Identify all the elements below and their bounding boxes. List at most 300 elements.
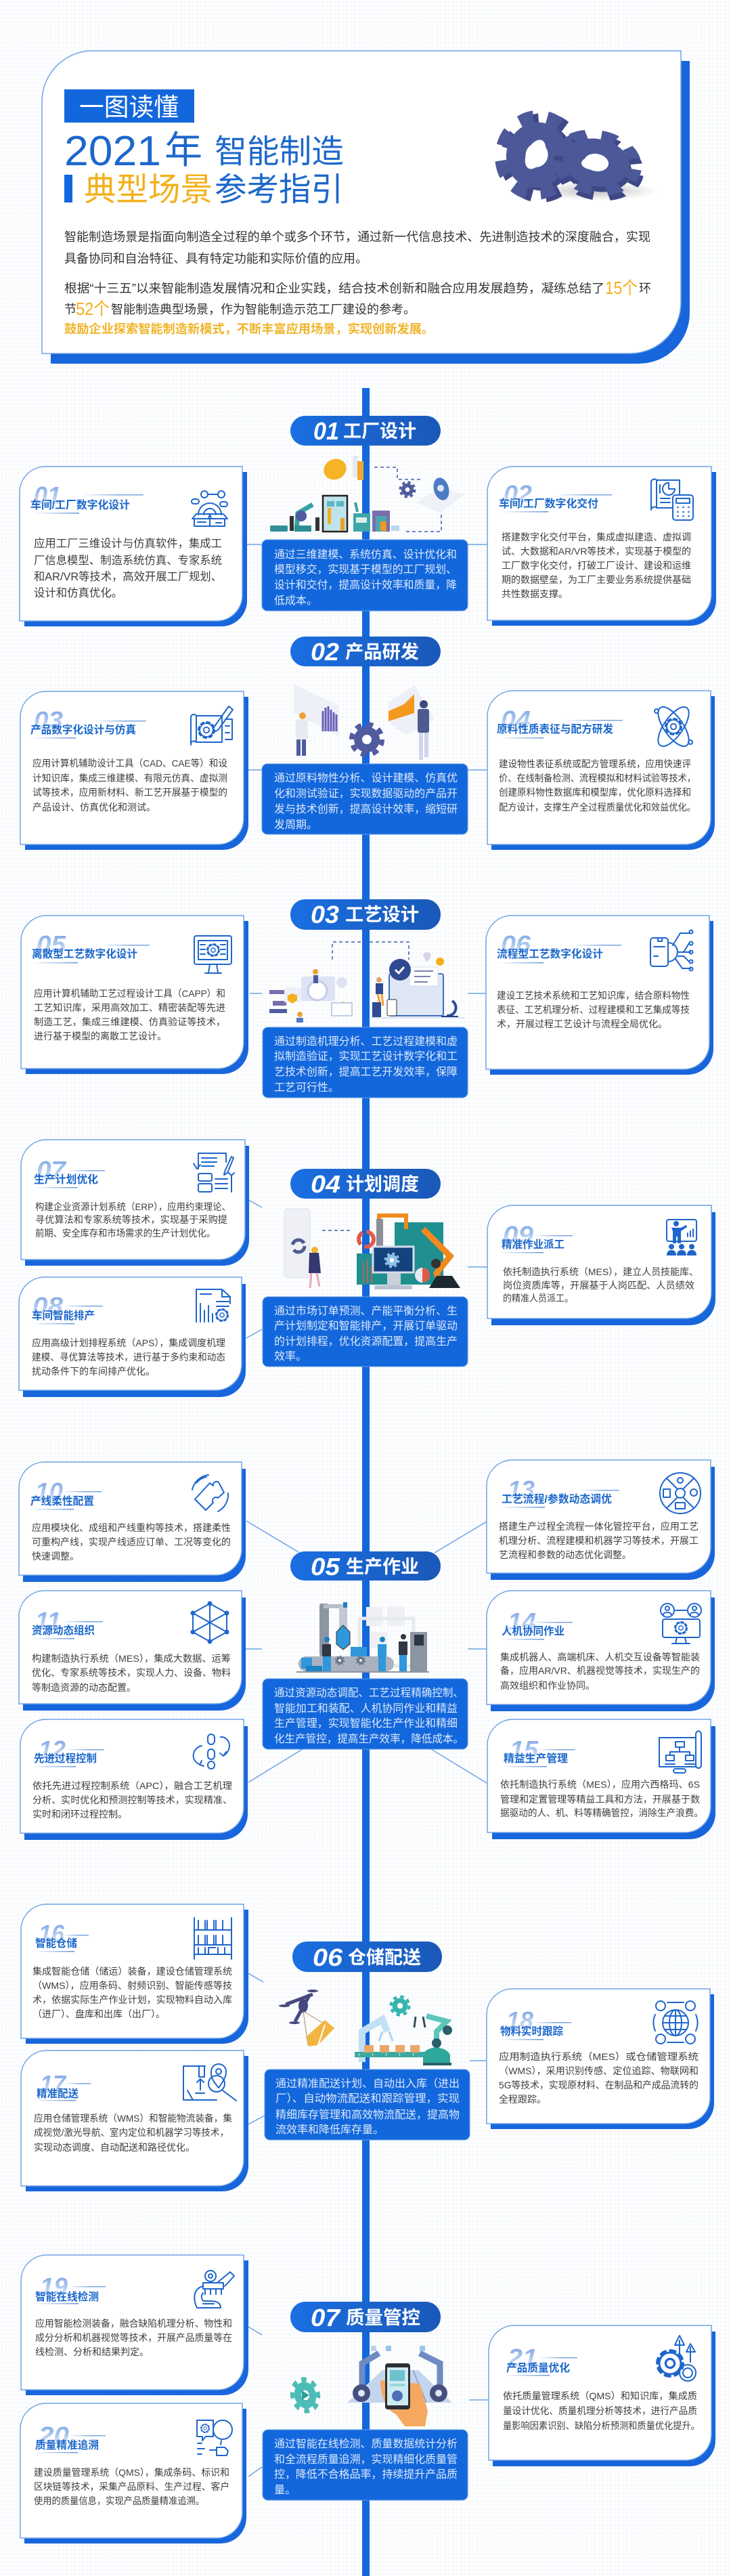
heading pill: 06 仓储配送: 仓储配送 (348, 1948, 421, 1968)
title: 智能制造 (215, 134, 344, 170)
icon: puzzle (192, 1475, 228, 1511)
card shape (487, 1591, 715, 1711)
section 04 (19, 1140, 715, 1397)
heading pill: 05 生产作业 (290, 1551, 441, 1581)
body text: 快速调整。 (32, 1551, 79, 1562)
decor lines and heading (500, 1622, 573, 1640)
section 05 (19, 1460, 715, 1840)
body text: 搭建数字化交付平台，集成虚拟建造、虚拟调 (502, 532, 691, 542)
summary box 01: 模型移交，实现基于模型的工厂规划、 (274, 563, 457, 576)
panel: scenario 12 (20, 1719, 248, 1840)
panel: scenario 06 (486, 916, 713, 1075)
body text: 实时和闭环过程控制。 (32, 1809, 127, 1820)
illustration: planning and scheduling (284, 1209, 460, 1289)
body text: （WMS），应用条码、射频识别、智能传感等技 (32, 1980, 232, 1991)
intro paragraph 2: 根据“十三五”以来智能制造发展情况和企业实践，结合技术创新和融合应用发展趋势，凝练总结了 (64, 282, 604, 295)
title: 参考指引 (215, 172, 343, 208)
panel: scenario 21 (489, 2325, 715, 2466)
card shape (20, 2403, 246, 2543)
body text: 集成智能仓储（储运）装备，建设仓储管理系统 (32, 1966, 232, 1977)
number: 21 (507, 2344, 537, 2371)
decor lines and heading: 车间智能排产 (32, 1309, 95, 1322)
summary box 05 (263, 1679, 468, 1749)
decor lines and heading (30, 1621, 103, 1639)
body text: 建模、寻优算法等技术，进行基于多约束和动态 (32, 1352, 225, 1362)
heading pill: 06 仓储配送: 06 (313, 1944, 343, 1971)
icon: blueprint and pencil (191, 706, 233, 745)
decor lines and heading (34, 1170, 105, 1188)
body text (32, 1522, 231, 1562)
number: 08 (32, 1292, 63, 1320)
number: 18 (506, 2006, 533, 2034)
decor lines and heading: 车间/工厂数字化交付 (499, 497, 598, 510)
body text: 量影响因素识别、缺陷分析预测和质量优化提升。 (503, 2420, 700, 2431)
panel: scenario 15 (487, 1719, 715, 1839)
body text: 实现动态调度、自动配送和路径优化。 (34, 2142, 195, 2153)
body text: 应用计算机辅助工艺过程设计工具（CAPP）和 (34, 988, 225, 999)
card shape (21, 1140, 249, 1266)
body text (34, 2113, 232, 2153)
number: 04 (501, 706, 531, 733)
body text: 进行基于模型的离散工艺设计。 (34, 1031, 167, 1042)
panel: scenario 14 (487, 1591, 715, 1711)
icon: warehouse shelves (194, 1918, 231, 1959)
body text: 创建原料物性数据库和模型库，优化原料选择和 (499, 787, 691, 798)
body text (500, 1652, 700, 1691)
body text: 成视觉/激光导航、室内定位和机器学习等技术， (34, 2127, 229, 2138)
panel: intro card (42, 51, 690, 364)
card shape (487, 467, 716, 626)
body text (32, 1966, 232, 2019)
heading pill: 01 工厂设计 (290, 416, 441, 446)
body text: 使用的质量信息，实现产品质量精准追溯。 (34, 2495, 204, 2506)
summary box 03: 拟制造验证，实现工艺设计数字化和工 (274, 1050, 458, 1062)
number: 03 (34, 706, 63, 734)
body text: 价、在线制备检测、流程模拟和材料试验等技术， (499, 773, 696, 783)
heading pill: 07 质量管控: 质量管控 (346, 2308, 420, 2328)
heading pill: 07 质量管控: 07 (311, 2304, 341, 2332)
number: 17 (40, 2070, 67, 2098)
title (64, 128, 344, 208)
intro card background (42, 51, 690, 364)
body text: 区块链等技术，采集产品原料、生产过程、客户 (34, 2481, 229, 2492)
summary box 02: 化和测试验证，实现数据驱动的产品开 (274, 788, 458, 800)
panel: scenario 11 (19, 1591, 246, 1711)
body text: 寻优算法和专家系统等技术，实现基于采购提 (35, 1214, 227, 1225)
body text: 应用计算机辅助设计工具（CAD、CAE等）和设 (32, 758, 227, 769)
card shape (20, 467, 247, 626)
summary box 03: 工艺可行性。 (274, 1081, 339, 1094)
body text: 据驱动的人、机、料等精确管控，消除生产浪费。 (500, 1807, 703, 1818)
card shape (487, 1205, 715, 1325)
number: 01 (34, 481, 61, 509)
body text: 期的数据壁垒，为工厂主要业务系统提供基础 (502, 574, 691, 585)
body text: 等制造资源的动态配置。 (32, 1682, 136, 1693)
panel: scenario 08 (19, 1277, 246, 1397)
body text (499, 758, 696, 813)
summary box 05: 智能加工和装配、人机协同作业和精益 (274, 1702, 458, 1715)
body text: 可重构产线，实现产线适应订单、工况等变化的 (32, 1537, 231, 1547)
summary box 06: 流效率和降低库存量。 (275, 2124, 384, 2136)
summary box 05: 化生产管控，提高生产效率，降低成本。 (274, 1733, 464, 1745)
decor lines and heading: 精准配送 (37, 2087, 79, 2100)
summary box 02: 发与技术创新，提高设计效率，缩短研 (274, 803, 458, 815)
summary box 07 (263, 2430, 468, 2500)
card shape (486, 916, 713, 1075)
icon: gears and rising arrows (657, 2336, 696, 2381)
summary box 04: 通过市场订单预测、产能平衡分析、生 (274, 1305, 458, 1317)
connector lines (246, 1521, 487, 1783)
card shape (19, 1462, 246, 1582)
body text: 应用模块化、成组和产线重构等技术，搭建柔性 (32, 1522, 231, 1533)
heading pill: 03 工艺设计: 03 (311, 901, 339, 928)
decor lines and heading: 车间/工厂数字化设计 (30, 498, 130, 511)
summary box 02: 通过原料物性分析、设计建模、仿真优 (274, 772, 458, 784)
heading pill: 01 工厂设计: 01 (313, 417, 339, 445)
body text: 制造工艺，集成三维建模、仿真验证等技术， (34, 1016, 225, 1027)
summary box 04 (263, 1297, 468, 1367)
card shape (487, 691, 715, 850)
body text: 依托制造执行系统（MES），建立人员技能库、 (503, 1266, 699, 1277)
decor lines and heading (502, 1749, 575, 1767)
connector lines (248, 769, 487, 771)
panel: scenario 03 (20, 691, 248, 850)
panel: scenario 09 (487, 1205, 715, 1325)
intro paragraph 1: 具备协同和自治特征、具有特定功能和实际价值的应用。 (64, 252, 368, 265)
intro paragraph 1: 智能制造场景是指面向制造全过程的单个或多个环节，通过新一代信息技术、先进制造技术的深度融合，实现 (64, 230, 650, 244)
body text: 工厂数字化交付，打破工厂设计、建设和运维 (502, 560, 691, 571)
intro paragraph 2: 节 (64, 303, 76, 316)
card shape (21, 2051, 248, 2191)
panel: scenario 16 (21, 1904, 248, 2044)
summary box 05: 通过资源动态调配、工艺过程精确控制、 (274, 1687, 464, 1699)
decor lines and heading: 产品质量优化 (506, 2361, 570, 2374)
body text (32, 1780, 232, 1820)
body text: 应用制造执行系统（MES）或仓储管理系统 (499, 2051, 699, 2062)
body text: 建设质量管理系统（QMS），集成条码、标识和 (34, 2467, 229, 2478)
central spine line (362, 388, 370, 2576)
card shape (487, 1989, 714, 2129)
summary box 06: 厂）、自动物流配送和跟踪管理，实现 (275, 2092, 460, 2105)
icon: human-machine monitor (661, 1604, 701, 1644)
body text: 试、大数据和AR/VR等技术，实现基于模型的 (502, 546, 691, 557)
body text (32, 758, 227, 813)
body text: 配方设计，支撑生产全过程质量优化和效益优化。 (499, 802, 696, 813)
body text: 机理分析、流程建模和机器学习等技术，开展工 (499, 1535, 699, 1546)
panel: scenario 01 (20, 467, 247, 626)
body text (34, 537, 222, 599)
body text: 术，开展过程工艺设计与流程全局优化。 (497, 1018, 667, 1029)
heading pill: 06 仓储配送 (292, 1941, 442, 1972)
decor lines and heading: 精准作业派工 (502, 1238, 564, 1251)
card shape (19, 1277, 246, 1397)
body text: 前期、安全库存和市场需求的生产计划优化。 (35, 1228, 215, 1239)
body text: 依托先进过程控制系统（APC），融合工艺机理 (32, 1780, 232, 1791)
summary box 04: 效率。 (274, 1350, 307, 1362)
icon: globe tracking (653, 2001, 698, 2044)
panel: scenario 04 (487, 691, 715, 850)
body text (503, 2390, 700, 2431)
heading pill: 07 质量管控 (290, 2302, 441, 2332)
section 01 (20, 416, 716, 626)
icon: resource hexagon (191, 1602, 229, 1643)
decor lines and heading: 生产计划优化 (34, 1173, 98, 1186)
body text: 厂信息模型、制造系统仿真、专家系统 (34, 555, 222, 567)
summary box 02 (262, 764, 468, 834)
number: 09 (503, 1221, 533, 1249)
body text: 应用智能检测装备，融合缺陷机理分析、物性和 (35, 2318, 232, 2329)
number: 11 (35, 1607, 61, 1635)
body text (35, 2318, 232, 2357)
body text: 和AR/VR等技术，高效开展工厂规划、 (34, 571, 222, 583)
decor lines and heading: 产品数字化设计与仿真 (30, 723, 136, 736)
number: 13 (508, 1476, 535, 1503)
decor lines and heading (32, 1749, 104, 1767)
body text: 试等技术，应用新材料、新工艺开展基于模型的 (32, 787, 227, 798)
icon: 3D gears (492, 108, 660, 205)
decor lines and heading: 人机协同作业 (502, 1625, 564, 1637)
summary box 07: 和全流程质量追溯，实现精细化质量管 (274, 2453, 458, 2466)
body text: 应用工厂三维设计与仿真软件，集成工 (34, 537, 222, 550)
decor lines and heading (505, 2357, 577, 2376)
decor lines and heading: 离散型工艺数字化设计 (32, 947, 137, 960)
icon: atom gear (652, 702, 694, 751)
icon: package and locator (183, 2064, 236, 2101)
icon: factory box gear (192, 491, 227, 526)
decor lines and heading: 先进过程控制 (34, 1752, 97, 1765)
heading pill: 04 计划调度 (290, 1169, 441, 1199)
illustration: warehouse and delivery (279, 1990, 452, 2065)
panel: scenario 18 (487, 1989, 714, 2129)
heading pill: 03 工艺设计: 工艺设计 (345, 905, 419, 925)
body text (499, 1521, 699, 1560)
number: 02 (504, 480, 532, 508)
panel: scenario 20 (20, 2403, 246, 2543)
summary box 02: 发周期。 (274, 819, 317, 831)
summary box 03: 艺技术创新，提高工艺开发效率，保障 (274, 1066, 458, 1078)
body text: 扰动条件下的车间排产优化。 (32, 1366, 155, 1377)
card shape (21, 916, 248, 1074)
decor lines and heading (34, 2286, 106, 2304)
body text: 建设物性表征系统或配方管理系统，应用快速评 (499, 758, 691, 769)
decor lines and heading (32, 2083, 91, 2101)
number: 14 (508, 1608, 536, 1635)
body text (32, 1653, 231, 1693)
number: 10 (35, 1478, 63, 1505)
decor lines and heading: 物料实时跟踪 (500, 2025, 563, 2038)
panel: scenario 07 (21, 1140, 249, 1266)
body text (502, 532, 691, 599)
connector lines (246, 1200, 487, 1338)
body text: 术，依据实际生产作业计划，实现物料自动入库 (32, 1994, 232, 2005)
section 02 (20, 637, 715, 850)
icon: quality tracing (197, 2420, 232, 2455)
icon: process wheel (660, 1473, 701, 1514)
body text (34, 988, 225, 1042)
number: 12 (39, 1736, 66, 1763)
decor lines and heading (499, 2022, 571, 2040)
intro paragraph 2: 15个 (605, 278, 638, 298)
body text: 工艺知识库，采用高效加工、精密装配等先进 (34, 1002, 225, 1013)
decor lines and heading: 智能仓储 (35, 1937, 77, 1950)
summary box 07: 控，降低不合格品率，持续提升产品质 (274, 2468, 458, 2481)
title: 年 (164, 129, 202, 171)
body text: 艺流程和参数的动态优化调整。 (499, 1549, 632, 1560)
body text: 高效组织和作业协同。 (500, 1680, 595, 1691)
number: 15 (510, 1736, 539, 1763)
intro highlight line: 鼓励企业探索智能制造新模式，不断丰富应用场景，实现创新发展。 (64, 322, 434, 336)
illustration: production line (296, 1602, 429, 1673)
number: 07 (37, 1156, 67, 1184)
heading pill: 04 计划调度: 04 (311, 1170, 340, 1198)
number: 16 (39, 1920, 65, 1948)
body text (35, 1201, 231, 1239)
connector lines (248, 1973, 487, 2124)
summary box 01: 低成本。 (274, 595, 317, 607)
body text: 岗位资质库等，开展基于人岗匹配、人员绩效 (503, 1280, 694, 1291)
intro paragraph 2: 智能制造典型场景，作为智能制造示范工厂建设的参考。 (111, 303, 416, 316)
heading pill: 03 工艺设计 (290, 899, 441, 930)
body text (499, 2051, 699, 2105)
title: 典型场景 (84, 172, 213, 208)
icon: presentation and team (667, 1220, 696, 1255)
connector lines (250, 993, 485, 994)
body text: 管理和定置管理等精益工具和方法，开展基于数 (500, 1794, 700, 1805)
badge: 一图读懂 (64, 89, 194, 123)
illustration: process design (269, 942, 464, 1023)
illustration: product R&D (294, 684, 435, 760)
icon: inspection microscope (194, 2271, 234, 2308)
body text: 共性数据支撑。 (502, 588, 568, 599)
heading pill: 02 产品研发: 02 (311, 638, 339, 666)
card shape (487, 1719, 715, 1839)
intro paragraph 2: 环 (639, 282, 651, 295)
body text: 构建企业资源计划系统（ERP），应用约束理论、 (35, 1201, 231, 1212)
panel: scenario 13 (487, 1460, 715, 1580)
body text: 全程跟踪。 (499, 2094, 546, 2105)
body text: 应用仓储管理系统（WMS）和智能物流装备，集 (34, 2113, 232, 2124)
card shape (20, 1719, 248, 1840)
section 06 (21, 1904, 714, 2191)
body text: （进厂）、盘库和出库（出厂）。 (32, 2009, 165, 2019)
decor lines and heading: 产线柔性配置 (30, 1495, 94, 1507)
body text (34, 2467, 229, 2506)
decor lines and heading: 流程型工艺数字化设计 (497, 947, 603, 960)
card shape (21, 1904, 248, 2044)
section 03 (21, 899, 713, 1098)
summary box 06: 通过精准配送计划、自动出入库（进出 (275, 2078, 460, 2090)
intro paragraph 2: 52个 (76, 299, 110, 319)
illustration: quality control (289, 2346, 452, 2426)
decor lines and heading: 资源动态组织 (32, 1624, 95, 1637)
decor lines and heading: 工艺流程/参数动态调优 (502, 1493, 612, 1505)
decor lines and heading (34, 2435, 106, 2453)
decor lines and heading: 智能在线检测 (35, 2290, 99, 2303)
summary box 03 (263, 1027, 468, 1098)
summary box 03: 通过制造机理分析、工艺过程建模和虚 (274, 1035, 458, 1048)
icon: scheduling document gear (196, 1289, 230, 1322)
body text: 成分分析和机器视觉等技术，开展产品质量等在 (35, 2332, 232, 2343)
decor lines and heading (32, 1935, 89, 1952)
icon: planning document (194, 1153, 234, 1192)
decor lines and heading: 质量精准追溯 (35, 2439, 99, 2451)
intro paragraph 2 (64, 278, 651, 319)
heading pill: 05 生产作业: 05 (311, 1553, 340, 1581)
body text: 设计和仿真优化。 (34, 587, 123, 599)
icon: lean flowchart (659, 1731, 701, 1773)
body text: 量设计优化、质量机理分析等技术，进行产品质 (503, 2405, 697, 2416)
body text: 线检测、分析和结果判定。 (35, 2346, 149, 2357)
decor lines and heading: 精益生产管理 (504, 1752, 568, 1765)
summary box 04: 产计划制定和智能排产，开展订单驱动 (274, 1320, 458, 1332)
panel: scenario 19 (21, 2255, 248, 2395)
body text: （WMS），采用识别传感、定位追踪、物联网和 (499, 2065, 699, 2076)
panel: scenario 05 (21, 916, 248, 1074)
icon: process loop (194, 1734, 229, 1769)
intro paragraph 1 (64, 230, 650, 265)
heading pill: 02 产品研发: 产品研发 (345, 642, 419, 662)
panel: scenario 02 (487, 467, 716, 626)
body text: 优化、专家系统等技术，实现人力、设备、物料 (32, 1667, 231, 1678)
number: 06 (501, 930, 531, 958)
icon: phone circuit (650, 930, 693, 971)
card shape (20, 691, 248, 850)
connector lines (245, 544, 487, 545)
body text: 集成机器人、高端机床、人机交互设备等智能装 (500, 1652, 700, 1662)
body text: 备，应用AR/VR、机器视觉等技术，实现生产的 (500, 1665, 700, 1676)
body text (32, 1337, 225, 1377)
heading pill: 04 计划调度: 计划调度 (346, 1174, 419, 1195)
icon: report and calculator (651, 479, 693, 520)
title: 2021 (64, 128, 161, 175)
summary box 06 (265, 2069, 470, 2140)
badge: 一图读懂: 一图读懂 (79, 93, 179, 121)
summary box 06: 精细库存管理和高效物流配送，提高物 (275, 2109, 460, 2121)
decor lines and heading: 原料性质表征与配方研发 (497, 723, 613, 735)
summary box 07: 量。 (274, 2485, 296, 2496)
summary box 01: 通过三维建模、系统仿真、设计优化和 (274, 549, 457, 561)
body text: 表征、工艺机理分析、过程建模和工艺集成等技 (497, 1004, 690, 1015)
decor lines and heading (29, 1491, 102, 1510)
summary box 01: 设计和交付，提高设计效率和质量，降 (274, 579, 457, 591)
heading pill: 01 工厂设计: 工厂设计 (343, 421, 416, 442)
body text: 依托制造执行系统（MES），应用六西格玛、6S (500, 1779, 700, 1790)
body text (503, 1266, 699, 1304)
summary box 01 (262, 540, 468, 611)
decor lines and heading (30, 1306, 103, 1325)
body text: 5G等技术，实现原材料、在制品和产成品流转的 (499, 2080, 699, 2090)
decor lines and heading (499, 1235, 573, 1253)
heading pill: 02 产品研发 (290, 637, 441, 666)
panel: scenario 17 (21, 2051, 248, 2191)
body text: 应用高级计划排程系统（APS），集成调度机理 (32, 1337, 225, 1348)
summary box 05: 生产管理，实现智能化生产作业和精细 (274, 1717, 458, 1730)
body text: 构建制造执行系统（MES），集成大数据、运筹 (32, 1653, 231, 1664)
number: 20 (38, 2422, 69, 2449)
number: 19 (40, 2273, 68, 2300)
body text: 搭建生产过程全流程一体化管控平台，应用工艺 (499, 1521, 699, 1532)
body text: 的精准人员派工。 (503, 1293, 573, 1304)
card shape (487, 1460, 715, 1580)
illustration: factory design (270, 455, 465, 532)
summary box 04: 的计划排程，优化资源配置，提高生产 (274, 1335, 458, 1348)
heading pill: 05 生产作业: 生产作业 (346, 1557, 419, 1577)
body text: 产品设计、仿真优化和测试。 (32, 802, 156, 813)
body text (497, 990, 690, 1029)
section 07 (20, 2255, 715, 2543)
icon: monitor gear (194, 936, 231, 973)
body text: 计知识库，集成三维建模、有限元仿真、虚拟测 (32, 773, 227, 783)
